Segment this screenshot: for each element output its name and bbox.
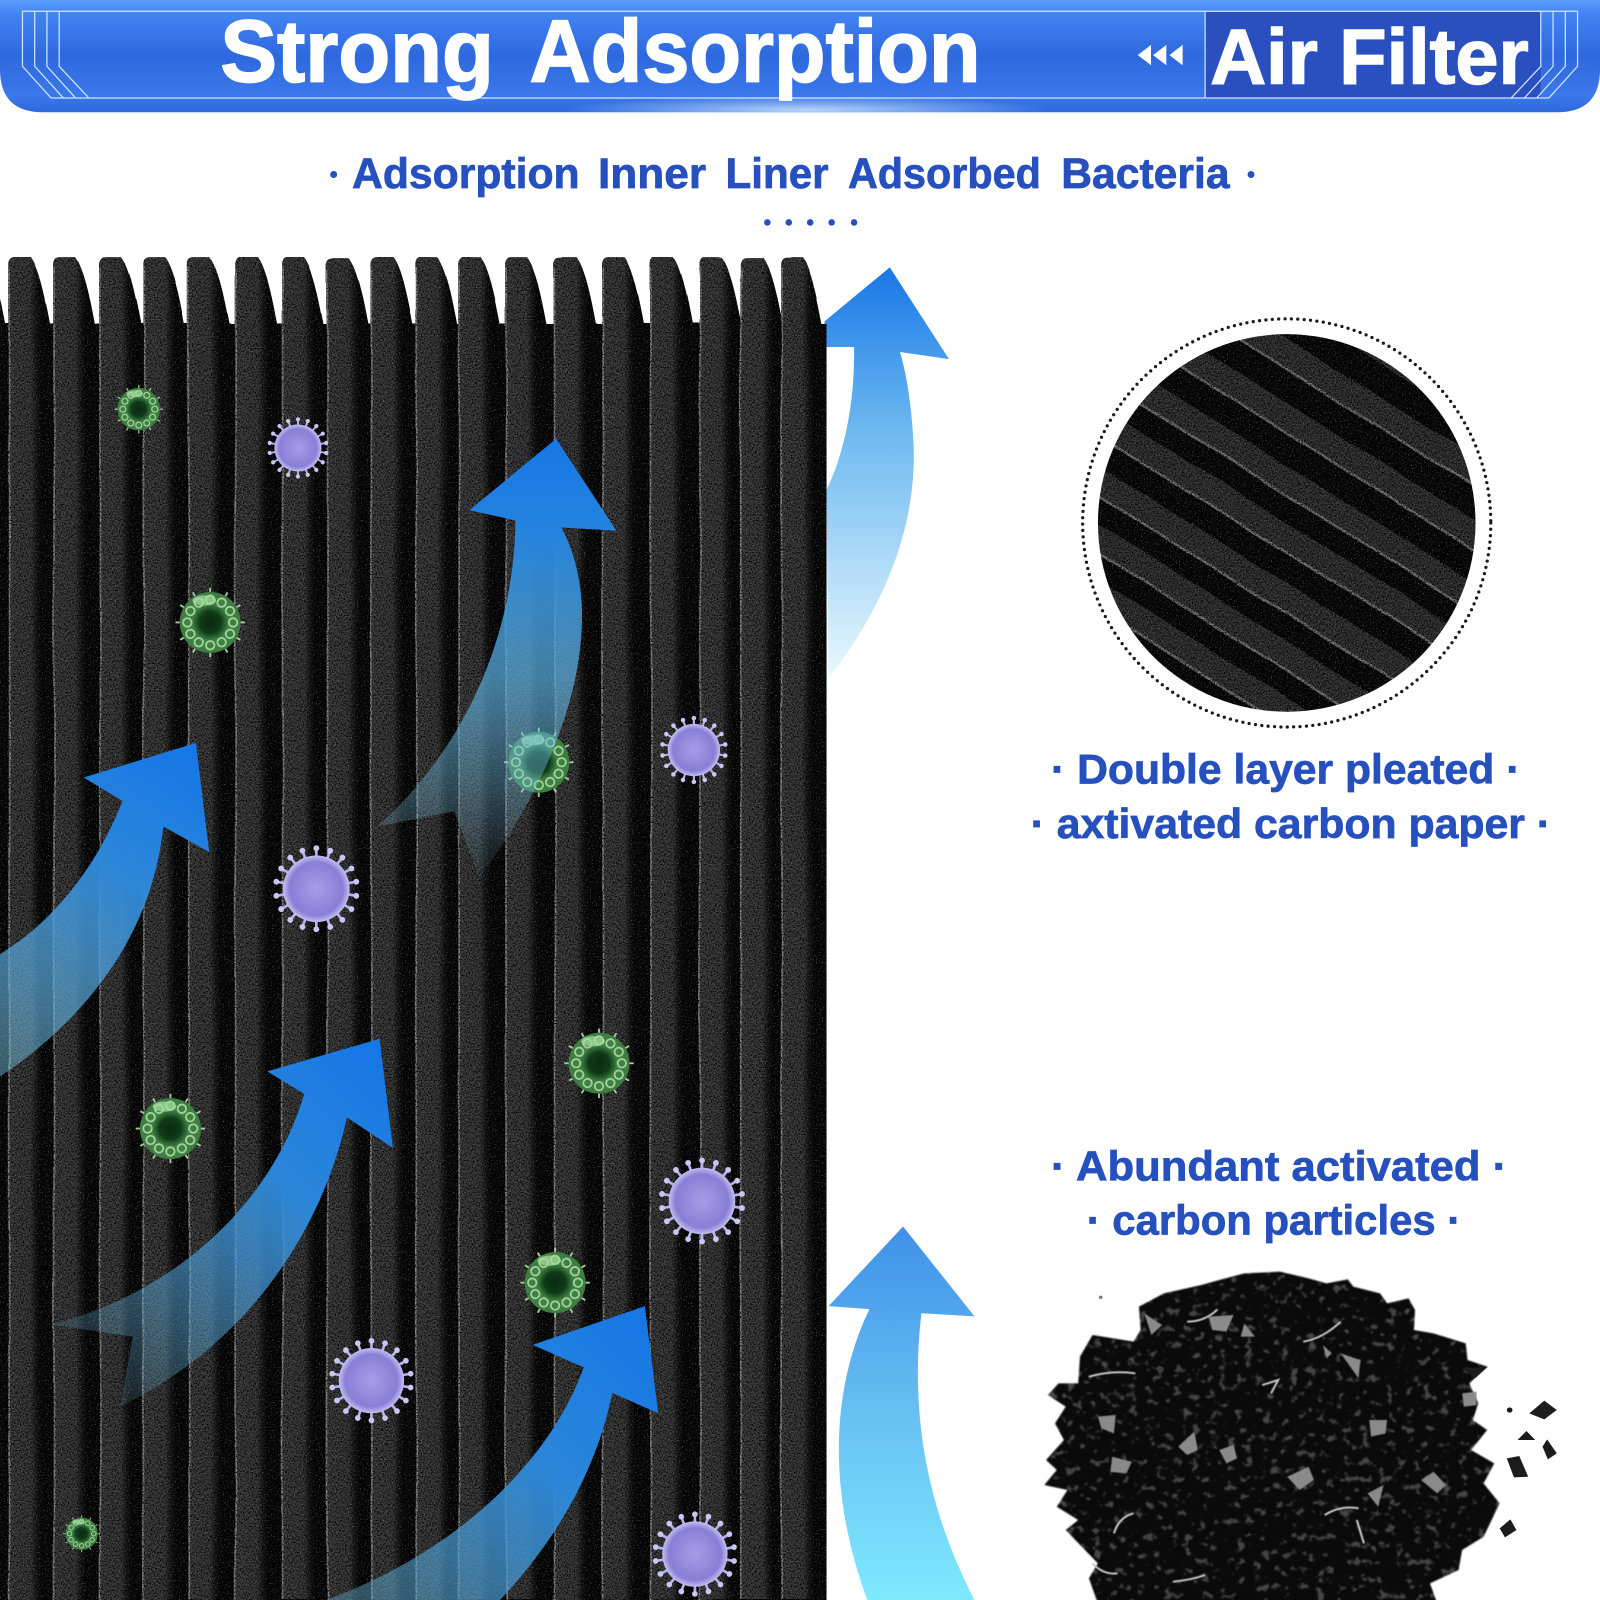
icon: green virus 2 [175, 588, 245, 657]
caption: double layer pleated: · axtivated carbon paper · [1031, 800, 1551, 847]
decorative dots under subheading [764, 219, 857, 226]
scattered carbon granules [1099, 1296, 1557, 1537]
icon: green virus 1 [115, 385, 163, 433]
icon: purple virus 3 [273, 845, 360, 932]
circular carbon paper photo [1098, 334, 1476, 712]
subheading: Liner [726, 150, 829, 198]
title: Strong [220, 3, 494, 101]
banner highlight [576, 97, 1036, 112]
arrow: middle left airflow [51, 1039, 393, 1406]
icon: purple virus 5 [329, 1338, 414, 1423]
panel: pleated paper close-up [1081, 317, 1492, 729]
icon: triple chevrons [1138, 45, 1183, 65]
dark label box [1205, 11, 1541, 98]
caption: abundant activated carbon: · carbon particles · [1087, 1197, 1461, 1244]
panel: header banner [0, 0, 1600, 124]
arrow: bottom airflow [327, 1306, 658, 1600]
icon: purple virus 4 [659, 1158, 745, 1245]
icon: purple virus 2 [660, 716, 728, 784]
pleated carbon paper [0, 257, 847, 1600]
caption: abundant activated carbon [1051, 1143, 1507, 1244]
subheading: Inner [598, 150, 706, 198]
subheading: Adsorbed [848, 150, 1041, 198]
arrow: upper left airflow [0, 743, 209, 1077]
dotted ring [1083, 319, 1491, 727]
panel: pleated filter [0, 257, 847, 1600]
product label: Air Filter [1210, 15, 1529, 101]
arrow: airflow entering bottom right [829, 1227, 974, 1600]
arrow: centre airflow [378, 439, 616, 878]
icon: purple virus 1 [267, 417, 329, 479]
icon: green virus 6 [520, 1248, 590, 1317]
icon: green virus 5 [136, 1094, 205, 1163]
panel: activated carbon particles [1044, 1272, 1557, 1600]
banner body [0, 0, 1600, 112]
caption: double layer pleated [1031, 746, 1551, 847]
subheading: Bacteria [1061, 150, 1231, 198]
subheading [330, 150, 1254, 198]
carbon pile [1044, 1272, 1500, 1600]
banner frame lines [22, 11, 1578, 98]
lighter carbon shards [1098, 1313, 1476, 1507]
icon: green virus 3 [504, 728, 574, 797]
subheading: Adsorption [352, 150, 580, 198]
title: Adsorption [530, 3, 981, 101]
arrow: airflow exiting top right [824, 267, 949, 679]
bright carbon edges [1089, 1309, 1364, 1582]
icon: green virus 7 [63, 1515, 100, 1552]
caption: double layer pleated: · Double layer pleated · [1051, 746, 1520, 793]
icon: purple virus 6 [652, 1511, 737, 1597]
icon: green virus 4 [564, 1029, 634, 1098]
title [220, 3, 981, 101]
caption: abundant activated carbon: · Abundant activated · [1051, 1143, 1507, 1190]
